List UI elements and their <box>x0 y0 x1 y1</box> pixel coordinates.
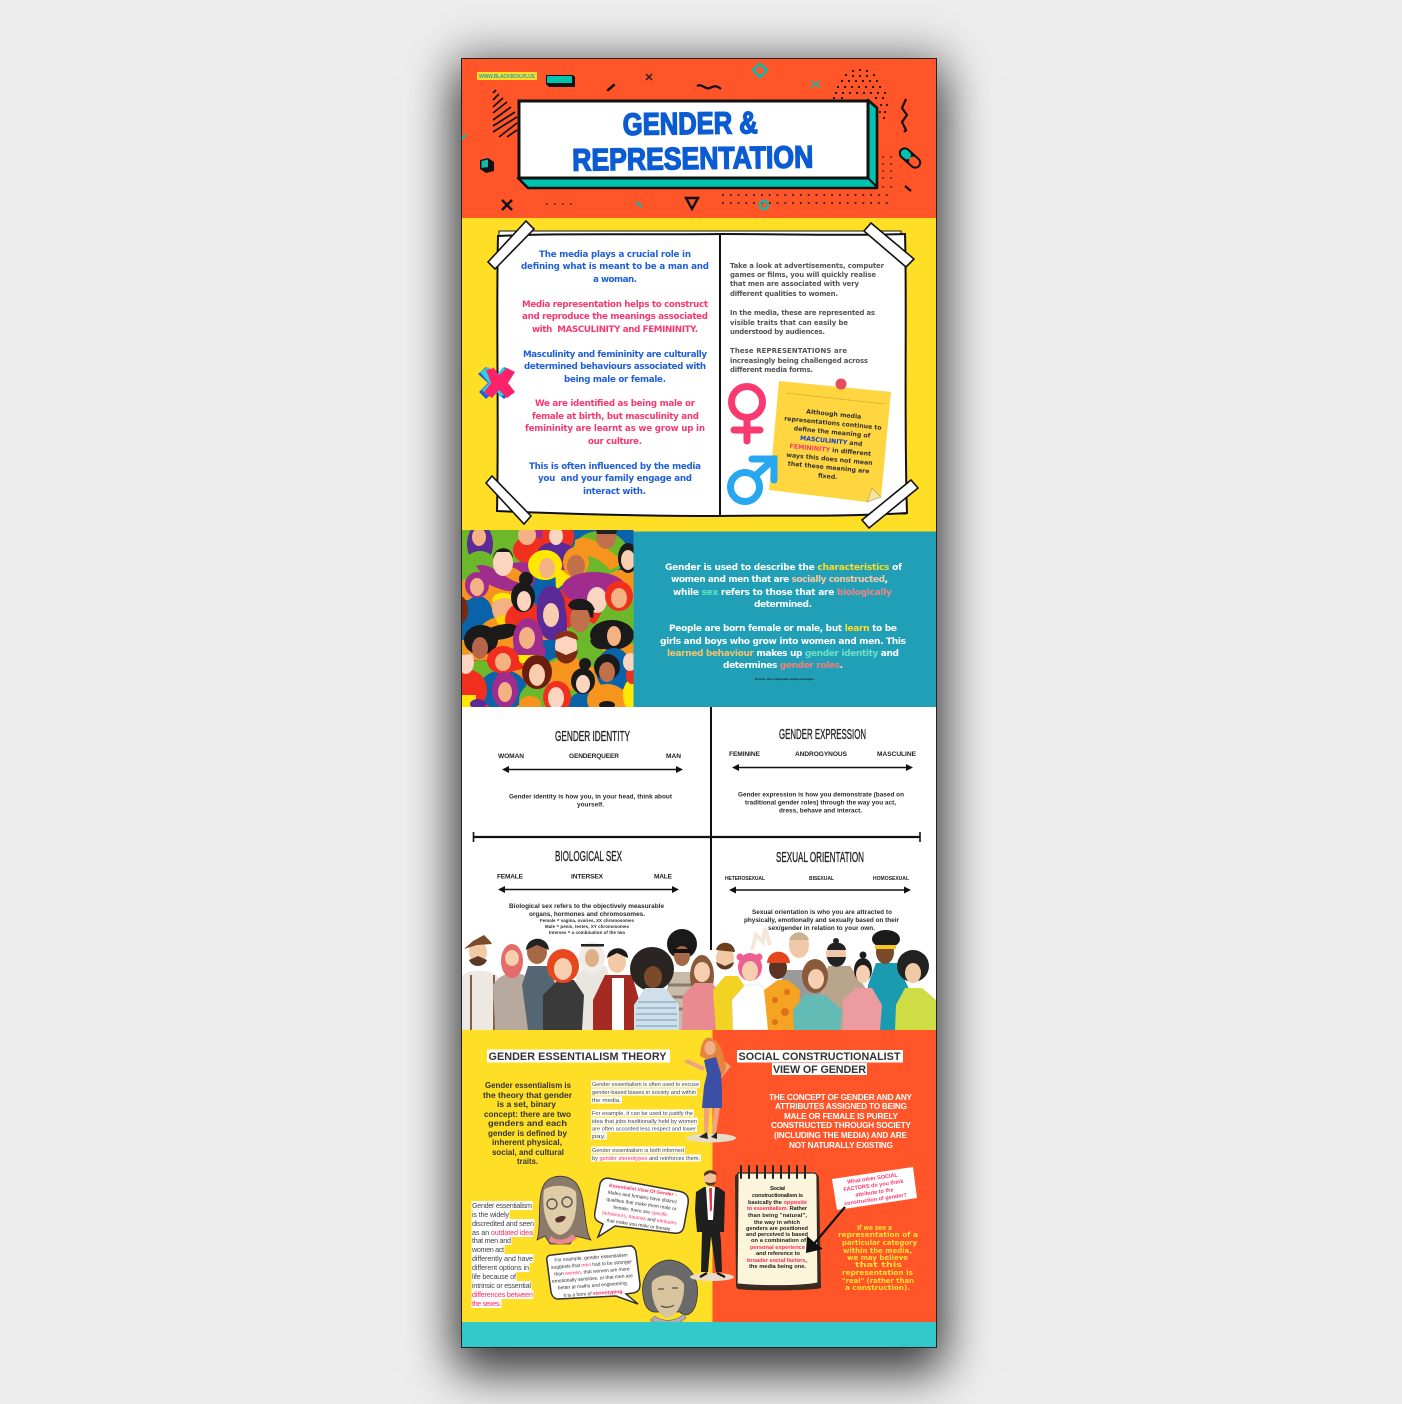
lower essentialism text: life because of <box>472 1272 516 1281</box>
notebook text: personal experience <box>750 1245 805 1251</box>
sticky note text: FEMININITY in different <box>789 443 871 458</box>
notebook text: the media being one. <box>749 1264 806 1270</box>
quadrant: gender expression: FEMININE <box>729 751 761 758</box>
title: GENDER & <box>623 105 758 142</box>
tape corners <box>486 221 918 528</box>
icon: female symbol <box>732 386 762 441</box>
speech bubble text: that make you male or female <box>606 1218 671 1233</box>
sticky note text: that these meaning are <box>787 460 870 475</box>
social constructionalist description: ATTRIBUTES ASSIGNED TO BEING <box>775 1102 907 1111</box>
yellow representation text: within the media, <box>843 1247 912 1255</box>
yellow representation text: a construction). <box>845 1284 910 1292</box>
speech bubble text: better at maths and engineering. <box>558 1281 628 1291</box>
right page text: increasingly being challenged across <box>730 357 868 365</box>
speech bubble text <box>550 1252 635 1300</box>
essentialism definition text: inherent physical, <box>492 1137 562 1147</box>
social constructionalist description: THE CONCEPT OF GENDER AND ANY <box>769 1093 913 1102</box>
panel: intro yellow notebook section <box>462 218 936 530</box>
notebook text: the way in which <box>754 1220 801 1226</box>
left page text: defining what is meant to be a man and <box>521 262 709 272</box>
right page text: Take a look at advertisements, computer <box>730 262 885 270</box>
right page text: that men are associated with very <box>730 280 860 288</box>
explanation text: while sex refers to those that are biologically <box>673 588 892 598</box>
speech bubble text: For example, gender essentialism <box>554 1252 628 1264</box>
character: curly haired person <box>643 1260 698 1325</box>
lower essentialism text: women act <box>471 1245 504 1254</box>
quadrant: sexual orientation: SEXUAL ORIENTATION <box>776 849 864 866</box>
essentialism definition text: the theory that gender <box>483 1090 573 1100</box>
quadrant: biological sex: Male = penis, testes, XY chromosomes <box>545 924 630 929</box>
question note text <box>841 1172 908 1207</box>
left page text: being male or female. <box>564 375 666 385</box>
left page text: interact with. <box>583 487 646 497</box>
lower essentialism text: intrinsic or essential <box>472 1281 531 1290</box>
lower essentialism text: Gender essentialism <box>472 1201 532 1210</box>
notebook text: to essentialism. Rather <box>747 1206 808 1212</box>
notebook text: broader social factors, <box>747 1258 807 1264</box>
quadrant: biological sex: BIOLOGICAL SEX <box>555 848 622 865</box>
highlighted side notes: gender-based biases in society and within <box>592 1090 696 1096</box>
essentialism definition text <box>483 1080 573 1166</box>
character: woman with glasses <box>537 1176 591 1244</box>
spiral notebook <box>735 1166 821 1290</box>
quadrant: gender expression: MASCULINE <box>877 751 917 758</box>
highlighted side notes: idea that jobs traditionally held by women <box>592 1119 697 1125</box>
left page text <box>521 250 709 497</box>
decorative memphis shapes <box>462 64 924 210</box>
speech bubble text: behaviours, traumas and attributes <box>602 1210 678 1227</box>
quadrant: sexual orientation <box>725 849 911 932</box>
panel: gender spectrums white section <box>462 707 936 1030</box>
yellow representation text: If we see a <box>857 1224 892 1232</box>
sticky note text: fixed. <box>818 472 838 481</box>
left page text: a woman. <box>593 275 637 285</box>
quadrant: sexual orientation: physically, emotionally and sexually based on their <box>744 917 900 924</box>
cross divider <box>473 707 920 950</box>
notebook text: and reference to <box>756 1251 801 1257</box>
left page text: with MASCULINITY and FEMININITY. <box>532 325 698 335</box>
panel: social constructionalist view <box>712 1030 936 1322</box>
notebook text: Social <box>770 1186 785 1192</box>
sticky note text: representations continue to <box>784 415 882 432</box>
right page text: understood by audiences. <box>730 328 825 336</box>
left page text: The media plays a crucial role in <box>539 250 691 260</box>
lower essentialism text: as an outdated idea <box>472 1228 533 1237</box>
explanation text: women and men that are socially constructed, <box>671 575 888 585</box>
question note text: What other SOCIAL <box>847 1172 899 1186</box>
highlighted side notes: by gender stereotypes and reinforces them. <box>592 1156 700 1162</box>
explanation text: girls and boys who grow into women and men. This <box>660 637 906 647</box>
quadrant: gender identity: MAN <box>666 753 681 760</box>
yellow representation text: "real" (rather than <box>842 1277 914 1285</box>
social constructionalist description: (INCLUDING THE MEDIA) AND ARE <box>774 1131 908 1140</box>
social constructionalist description: CONSTRUCTED THROUGH SOCIETY <box>771 1121 912 1130</box>
right page text: different qualities to women. <box>730 290 838 298</box>
bottom teal band <box>462 1322 936 1347</box>
icon: cross <box>478 367 515 399</box>
highlighted side notes: Gender essentialism is often used to excuse <box>592 1082 699 1088</box>
quadrant: gender identity: WOMAN <box>498 753 524 760</box>
title: REPRESENTATION <box>572 139 813 178</box>
notebook text <box>746 1186 809 1270</box>
yellow representation text: representation of a <box>838 1231 918 1239</box>
quadrant: gender identity <box>498 728 683 808</box>
highlighted side notes: are often accorded less respect and lower <box>592 1126 696 1132</box>
speech bubble text: female; there are specific <box>613 1205 668 1218</box>
sticky note text: Although media <box>806 408 862 421</box>
right page text <box>730 262 885 374</box>
back row people <box>660 928 914 1030</box>
notebook text: than being "natural", <box>748 1213 807 1219</box>
quadrant: gender expression: GENDER EXPRESSION <box>779 726 866 743</box>
speech bubble text: Essentialist View Of Gender – <box>609 1183 678 1198</box>
question note text: construction of gender? <box>844 1192 908 1207</box>
speech bubble text: than women, that women are more <box>554 1266 630 1278</box>
social constructionalist description: MALE OR FEMALE IS PURELY <box>784 1112 899 1121</box>
lower essentialism text: the sexes. <box>472 1299 501 1308</box>
yellow representation text <box>838 1224 918 1292</box>
highlighted side notes: pay. <box>592 1134 607 1140</box>
lower essentialism text <box>471 1201 534 1308</box>
quadrant: gender expression: Gender expression is how you demonstrate (based on <box>738 792 904 798</box>
sticky note <box>769 378 891 502</box>
quadrant: gender identity: GENDER IDENTITY <box>555 728 630 745</box>
left page text: This is often influenced by the media <box>529 462 701 472</box>
essentialism definition text: concept: there are two <box>484 1109 571 1119</box>
quadrant: biological sex: MALE <box>654 874 673 880</box>
question note text: FACTORS do you think <box>843 1179 905 1193</box>
character: woman in blue dress <box>684 1038 736 1142</box>
title <box>572 104 813 178</box>
icon: male symbol <box>730 459 774 502</box>
highlighted side notes <box>591 1080 701 1162</box>
lower essentialism text: discredited and seen <box>472 1219 534 1228</box>
right page text: games or films, you will quickly realise <box>730 271 876 279</box>
highlighted side notes: For example, it can be used to justify the <box>592 1111 693 1117</box>
speech bubble text: qualities that make them male or <box>606 1197 677 1212</box>
sticky note text: ways this does not mean <box>786 452 873 467</box>
notebook text: genders are positioned <box>746 1226 809 1232</box>
left page text: We are identified as being male or <box>535 399 696 409</box>
right page text: In the media, these are represented as <box>730 309 875 317</box>
sticky note text: MASCULINITY and <box>800 435 863 448</box>
essentialism definition text: Gender essentialism is <box>485 1080 571 1090</box>
notebook page <box>497 234 907 516</box>
left page text: and reproduce the meanings associated <box>522 312 708 322</box>
arrow: question to notebook <box>806 1207 845 1253</box>
quadrant: biological sex: FEMALE <box>497 874 524 880</box>
illustration: row of diverse people <box>462 928 936 1030</box>
quadrant: sexual orientation: BISEXUAL <box>809 876 834 882</box>
quadrant: sexual orientation: Sexual orientation is who you are attracted to <box>752 909 892 916</box>
left page text: determined behaviours associated with <box>524 362 706 372</box>
essentialism definition text: traits. <box>517 1156 538 1166</box>
quadrant: sexual orientation: HOMOSEXUAL <box>873 876 909 882</box>
quadrant: gender expression: traditional gender roles) through the way you act, <box>745 800 896 806</box>
left page text: Media representation helps to construct <box>522 300 708 310</box>
notebook back sheet <box>497 231 906 514</box>
yellow representation text: that this <box>855 1261 902 1269</box>
left page text: Masculinity and femininity are culturally <box>523 350 707 360</box>
left page text: our culture. <box>588 437 642 447</box>
speech bubble: stereotyping example <box>547 1246 640 1304</box>
speech bubble text: It is a form of stereotyping. <box>563 1289 624 1299</box>
right page text: visible traits that can easily be <box>730 319 848 327</box>
explanation text: determines gender roles. <box>723 661 843 671</box>
speech bubble text: emotionally sensitive, or that men are <box>552 1273 633 1285</box>
lower essentialism text: that men and <box>472 1236 511 1245</box>
essentialism definition text: is a set, binary <box>497 1099 556 1109</box>
heading: gender essentialism theory: GENDER ESSENTIALISM THEORY <box>488 1051 667 1063</box>
notebook text: on a combination of <box>751 1238 806 1244</box>
front row left people <box>462 935 679 1030</box>
question note text: attribute to the <box>855 1187 894 1199</box>
lower essentialism text: different options in <box>472 1263 529 1272</box>
panel: gender vs sex explanation <box>634 530 936 707</box>
quadrant: biological sex: Intersex = a combination of the two <box>549 930 625 935</box>
explanation text: learned behaviour makes up gender identity and <box>667 649 899 659</box>
sticky note text <box>779 406 883 485</box>
explanation text <box>660 563 906 671</box>
yellow representation text: we may believe <box>847 1254 908 1262</box>
speech bubble: essentialist view <box>595 1178 688 1237</box>
heading: social constructionalist <box>737 1050 903 1076</box>
lower essentialism text: differences between <box>472 1290 533 1299</box>
title box 3D side <box>518 100 877 188</box>
heading: social constructionalist: VIEW OF GENDER <box>773 1064 866 1076</box>
front row right people <box>682 943 936 1030</box>
quadrant: gender expression <box>729 726 917 814</box>
left page text: femininity are learnt as we grow up in <box>525 424 705 434</box>
social constructionalist description <box>769 1093 913 1150</box>
quadrant: gender expression: dress, behave and interact. <box>779 808 862 814</box>
panel: gender essentialism theory <box>462 1030 712 1325</box>
notebook text: basically the opposite <box>748 1200 807 1206</box>
quadrant: gender identity: Gender identity is how you, in your head, think about <box>509 794 673 800</box>
quadrant: biological sex: Female = vagina, ovaries, XX chromosomes <box>540 918 635 923</box>
yellow representation text: particular category <box>842 1239 918 1247</box>
quadrant: biological sex <box>497 848 679 935</box>
speech bubble text: suggests that men had to be stronger <box>551 1259 633 1271</box>
quadrant: biological sex: Biological sex refers to the objectively measurable <box>509 903 664 910</box>
explanation text: Gender is used to describe the characteristics of <box>665 563 902 573</box>
explanation text: determined. <box>754 600 812 610</box>
quadrant: gender expression: ANDROGYNOUS <box>795 751 848 758</box>
left page text: female at birth, but masculinity and <box>532 412 699 422</box>
question note <box>832 1167 917 1210</box>
yellow representation text: representation is <box>842 1269 913 1277</box>
quadrant: gender identity: GENDERQUEER <box>569 753 619 760</box>
title box face <box>519 101 868 178</box>
notebook text: and perceived is based <box>746 1232 809 1238</box>
highlighted side notes: the media. <box>592 1098 621 1104</box>
sticky note text: define the meaning of <box>793 425 871 440</box>
spine divider <box>719 234 721 517</box>
quadrant: sexual orientation: HETEROSEXUAL <box>725 876 765 882</box>
highlighted side notes: Gender essentialism is both informed <box>592 1148 684 1154</box>
quadrant: sexual orientation: sex/gender in relation to your own. <box>768 925 875 932</box>
panel: header banner <box>462 59 936 218</box>
explanation text: People are born female or male, but learn to be <box>669 624 897 634</box>
lower essentialism text: differently and have <box>472 1254 533 1263</box>
essentialism definition text: social, and cultural <box>492 1147 564 1157</box>
website tag: WWW.BLACKBOX.PLUS <box>479 74 536 80</box>
lower essentialism text: is the widely <box>472 1210 509 1219</box>
left page text: you and your family engage and <box>538 474 692 484</box>
right page text: These REPRESENTATIONS are <box>730 347 847 355</box>
social constructionalist description: NOT NATURALLY EXISTING <box>789 1141 893 1150</box>
speech bubble text <box>601 1182 682 1234</box>
right page text: different media forms. <box>730 366 813 374</box>
speech bubble text: Males and females have distinct <box>607 1190 678 1205</box>
illustration: crowd of diverse faces <box>462 530 634 707</box>
poster frame <box>461 58 937 1348</box>
quadrant: biological sex: INTERSEX <box>571 874 604 880</box>
notebook text: constructionalism is <box>752 1193 803 1199</box>
essentialism definition text: genders and each <box>488 1118 567 1128</box>
tiny source line: Source: who.int/gender-equity-and-rights <box>755 677 814 681</box>
essentialism definition text: gender is defined by <box>488 1128 567 1138</box>
quadrant: biological sex: organs, hormones and chromosomes. <box>529 911 645 918</box>
quadrant: gender identity: yourself. <box>577 802 604 808</box>
character: man in black suit <box>690 1170 734 1281</box>
heading: social constructionalist: SOCIAL CONSTRUCTIONALIST <box>738 1051 901 1063</box>
